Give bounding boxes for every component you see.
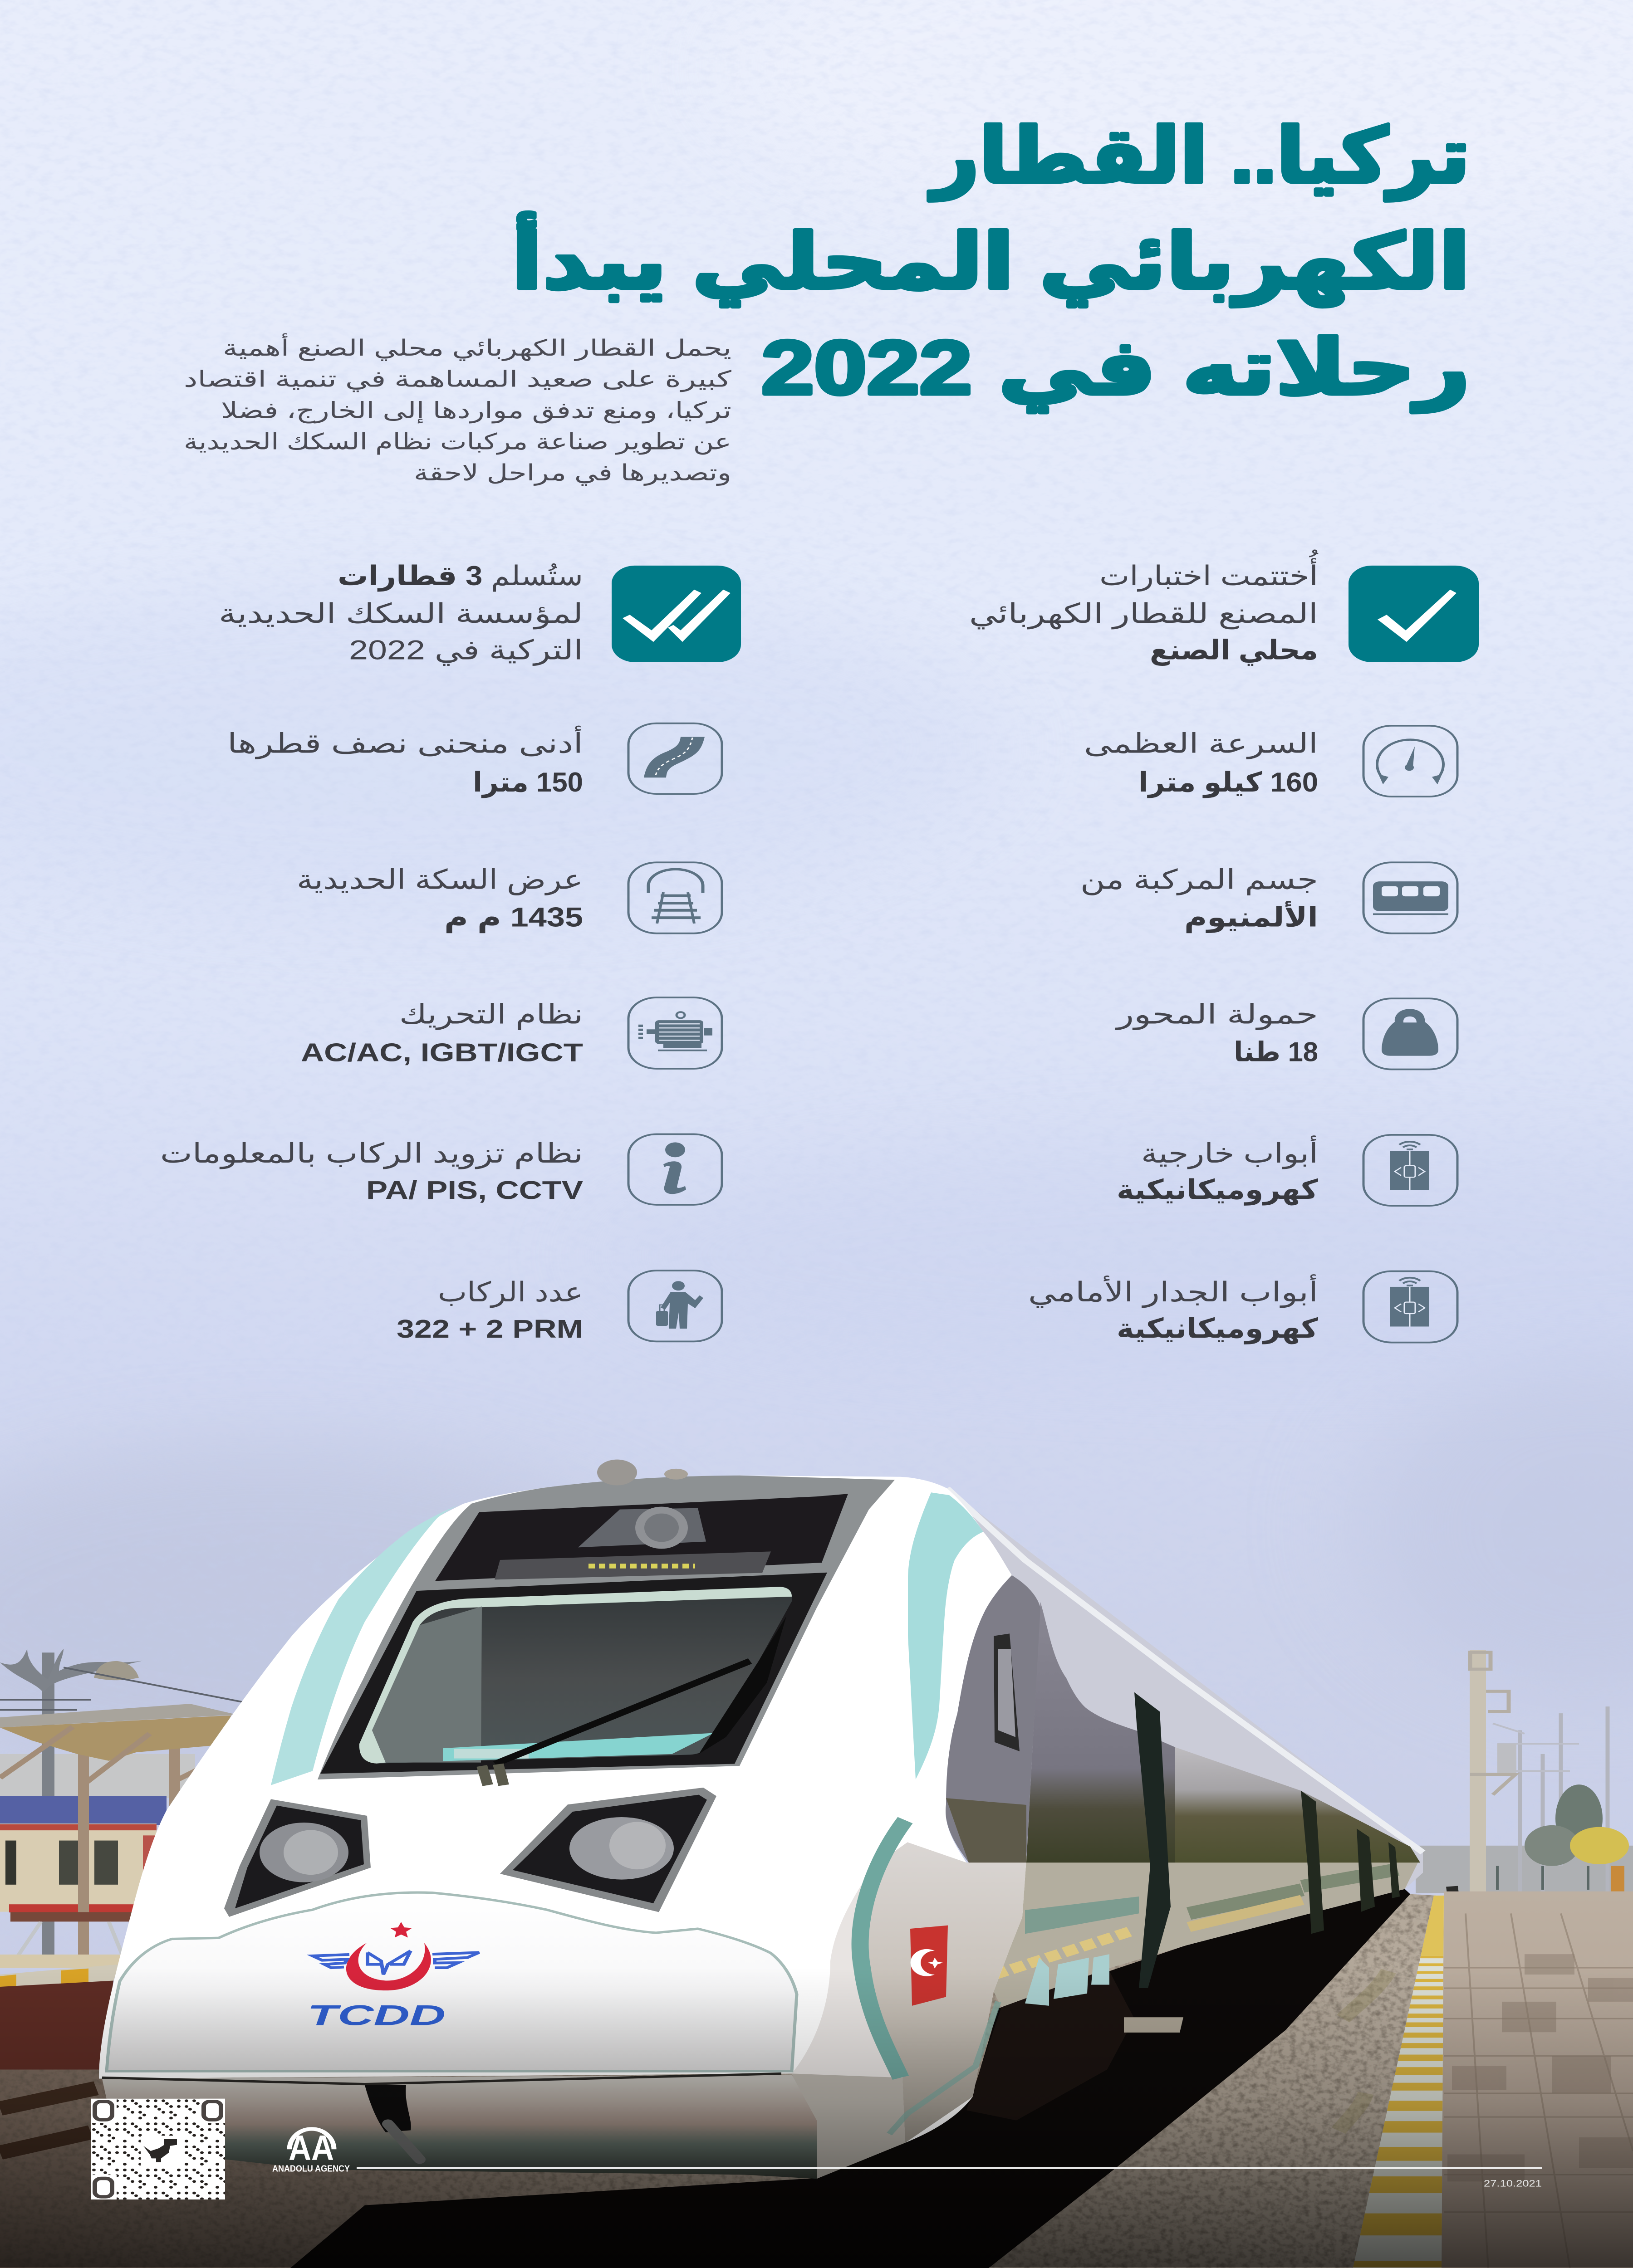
- icon: double check badge: [612, 566, 741, 662]
- title: تركيا.. القطار: [928, 113, 1470, 201]
- intro text block: كبيرة على صعيد المساهمة في تنمية اقتصاد: [184, 367, 731, 392]
- train: TCDD logo: [307, 1922, 479, 2031]
- text: axle load: حمولة المحور: [1115, 999, 1318, 1031]
- text: aluminium body: جسم المركبة من: [1080, 864, 1318, 896]
- icon: front wall door: [1363, 1271, 1457, 1343]
- title: [511, 113, 1470, 412]
- text: aluminium body: [1080, 864, 1318, 934]
- icon: information: [628, 1134, 722, 1205]
- text: max speed: [1084, 728, 1318, 798]
- train: skirt and coupler: [102, 2073, 817, 2179]
- icon: rail track and tunnel: [628, 862, 722, 934]
- text: track gauge: 1435 م م: [444, 902, 583, 934]
- intro text block: [184, 333, 731, 486]
- icon: traction motor: [628, 997, 722, 1069]
- icon: speedometer: [1363, 726, 1457, 797]
- text: axle load: [1115, 999, 1318, 1067]
- text: number of passengers: 322 + 2 PRM: [397, 1315, 583, 1344]
- photo: right horizon scene: [1416, 1650, 1633, 1966]
- text: max speed: 160 كيلو مترا: [1138, 767, 1318, 798]
- train: side body: [942, 1488, 1423, 2007]
- text: minimum curve radius: 150 مترا: [473, 767, 583, 798]
- train: left headlight: [224, 1799, 371, 1917]
- icon: sliding door exterior: [1363, 1135, 1457, 1206]
- text: factory tests completed: [969, 549, 1319, 666]
- text: traction system: [301, 999, 583, 1067]
- train: hood panel: [107, 1892, 797, 2071]
- text: factory tests completed: محلي الصنع: [1150, 635, 1318, 666]
- text: minimum curve radius: [227, 726, 583, 798]
- train: roof and gray frame: [318, 1476, 895, 1779]
- icon: curved road: [628, 723, 722, 794]
- Anadolu Agency logo: ANADOLU AGENCY: [272, 2164, 350, 2174]
- text: number of passengers: عدد الركاب: [438, 1277, 583, 1308]
- footer divider and date: 27.10.2021: [1484, 2179, 1542, 2189]
- text: front wall doors: كهروميكانيكية: [1117, 1313, 1319, 1344]
- text: passenger information system: PA/ PIS, CCTV: [366, 1176, 583, 1205]
- train: TCDD logo: TCDD: [307, 1999, 446, 2031]
- text: passenger information system: [160, 1138, 583, 1205]
- Anadolu Agency logo: [272, 2128, 350, 2174]
- text: three trains delivered: التركية في 2022: [349, 635, 583, 666]
- text: three trains delivered: لمؤسسة السكك الحديدية: [219, 598, 583, 630]
- text: axle load: 18 طنا: [1234, 1036, 1318, 1067]
- text: number of passengers: [397, 1277, 583, 1344]
- photo: train shadow and bogies: [290, 1889, 1410, 2268]
- text: traction system: نظام التحريك: [399, 999, 583, 1031]
- text: track gauge: عرض السكة الحديدية: [297, 864, 583, 896]
- text: front wall doors: [1028, 1274, 1319, 1344]
- photo: platform paving: [1442, 1892, 1633, 2268]
- intro text block: يحمل القطار الكهربائي محلي الصنع أهمية: [223, 333, 731, 362]
- bottom dark gradient: [0, 1968, 1633, 2268]
- text: exterior doors: كهروميكانيكية: [1117, 1174, 1319, 1206]
- text: max speed: السرعة العظمى: [1084, 728, 1318, 760]
- text: factory tests completed: المصنع للقطار الكهربائي: [969, 598, 1318, 630]
- train: right headlight: [500, 1788, 716, 1912]
- intro text block: تركيا، ومنع تدفق مواردها إلى الخارج، فضلا: [221, 398, 731, 424]
- photo: yellow and white platform curb: [1353, 1895, 1444, 2268]
- text: track gauge: [297, 864, 583, 934]
- train: windscreen: [320, 1573, 827, 1785]
- intro text block: عن تطوير صناعة مركبات نظام السكك الحديدية: [184, 429, 731, 455]
- Anadolu Agency logo: AA: [289, 2128, 334, 2167]
- train: teal accent beside windscreen: [271, 1505, 458, 1785]
- train: turkish flag: [910, 1926, 948, 2006]
- icon: train car body: [1363, 862, 1457, 934]
- QR code: [91, 2099, 225, 2200]
- text: exterior doors: أبواب خارجية: [1141, 1135, 1318, 1169]
- text: three trains delivered: ستُسلم 3 قطارات: [338, 561, 583, 592]
- photo: ballast ground: [0, 1892, 1436, 2268]
- icon: axle load weight: [1363, 998, 1457, 1070]
- text: factory tests completed: أُختتمت اختبارات: [1099, 549, 1319, 592]
- text: minimum curve radius: أدنى منحنى نصف قطرها: [227, 726, 583, 760]
- title: رحلاته في 2022: [761, 325, 1470, 412]
- train: white nose: [99, 1476, 1040, 2179]
- footer divider and date: [357, 2167, 1542, 2189]
- icon: single check badge: [1349, 566, 1479, 662]
- text: exterior doors: [1117, 1135, 1319, 1206]
- text: traction system: AC/AC, IGBT/IGCT: [301, 1038, 583, 1067]
- text: aluminium body: الألمنيوم: [1184, 901, 1318, 934]
- text: front wall doors: أبواب الجدار الأمامي: [1028, 1274, 1318, 1308]
- train: upper window with headlight and display: [435, 1494, 848, 1581]
- photo: left station scene: [0, 1649, 245, 2078]
- icon: passenger with suitcase: [628, 1271, 722, 1341]
- title: الكهربائي المحلي يبدأ: [511, 212, 1470, 307]
- text: three trains delivered: [219, 561, 583, 666]
- train: roof mounted horns: [597, 1460, 688, 1485]
- text: passenger information system: نظام تزويد الركاب بالمعلومات: [160, 1138, 583, 1169]
- intro text block: وتصديرها في مراحل لاحقة: [414, 460, 731, 486]
